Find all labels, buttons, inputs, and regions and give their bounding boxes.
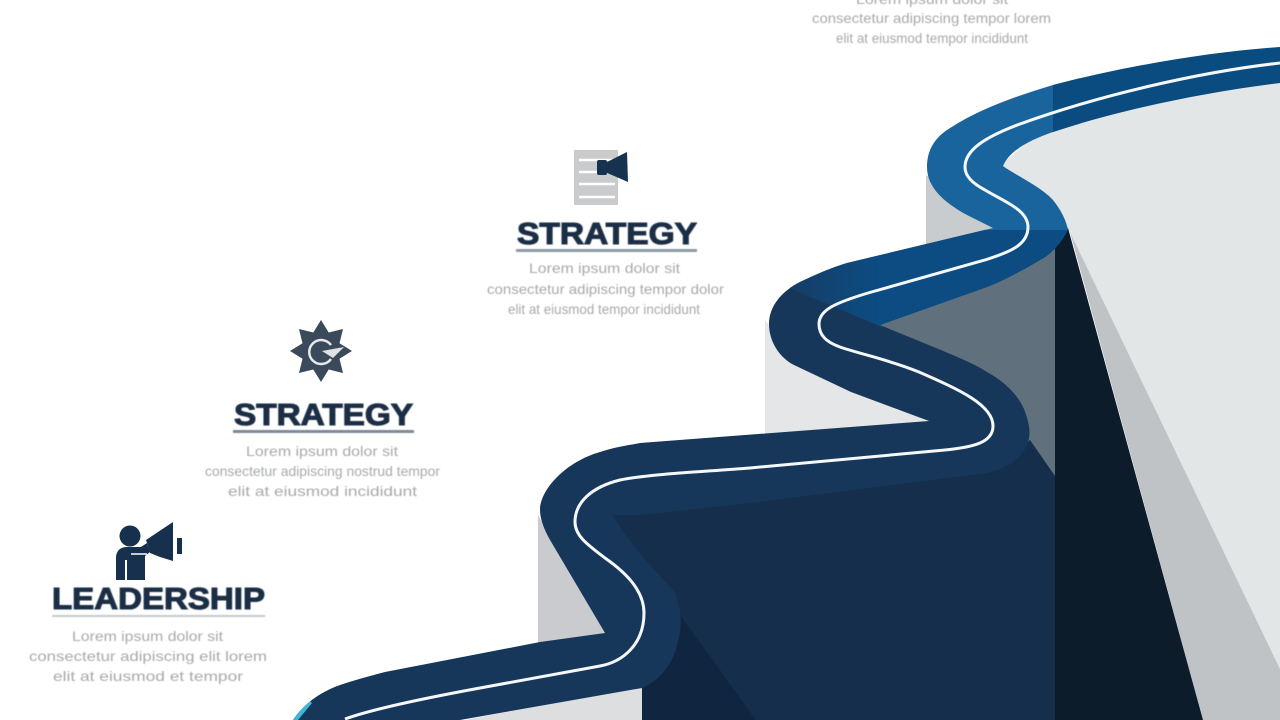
ribbon deep blue middle section — [790, 230, 1068, 327]
heading: strategy lower: STRATEGY — [234, 397, 413, 432]
heading: leadership: LEADERSHIP — [52, 581, 265, 616]
body line 2: consectetur adipiscing tempor dolor — [487, 281, 724, 297]
body line 2: consectetur adipiscing nostrud tempor — [205, 463, 440, 479]
ribbon center white line — [345, 63, 1280, 719]
slate panel behind ribbon — [870, 240, 1055, 480]
section: strategy lower — [205, 397, 440, 499]
top body line 3: elit at eiusmod tempor incididunt — [836, 30, 1028, 46]
staircase top surface — [995, 70, 1280, 669]
heading: strategy upper: STRATEGY — [517, 216, 697, 251]
body line 1: Lorem ipsum dolor sit — [72, 628, 223, 644]
body line 1: Lorem ipsum dolor sit — [529, 260, 680, 276]
top body line 2: consectetur adipiscing tempor lorem — [812, 10, 1051, 26]
top text block — [812, 0, 1051, 46]
bottom step wall — [455, 686, 642, 720]
body line 3: elit at eiusmod incididunt — [228, 483, 417, 499]
icon: gear star with compass — [290, 320, 352, 382]
icon: person with megaphone — [116, 522, 182, 580]
ribbon dark lower section — [280, 230, 1080, 720]
section: strategy upper — [487, 216, 724, 317]
body line 2: consectetur adipiscing elit lorem — [29, 648, 267, 664]
cyan ribbon edge — [293, 702, 312, 720]
body line 3: elit at eiusmod tempor incididunt — [508, 301, 700, 317]
body line 1: Lorem ipsum dolor sit — [246, 443, 398, 459]
ribbon top right section — [1053, 47, 1280, 132]
ribbon bright blue section — [927, 78, 1080, 230]
shadow facet grey — [1070, 232, 1280, 720]
front block shadow — [642, 612, 756, 720]
winding ribbon road — [280, 30, 1280, 720]
lower step wall — [538, 515, 606, 646]
body line 3: elit at eiusmod et tempor — [53, 668, 243, 684]
middle step wall — [765, 320, 935, 438]
section: leadership — [29, 581, 267, 684]
upper step wall — [926, 175, 1000, 245]
dark right wall — [1055, 228, 1203, 720]
dark blue front block — [605, 440, 1055, 720]
icon: document with megaphone — [574, 150, 628, 205]
